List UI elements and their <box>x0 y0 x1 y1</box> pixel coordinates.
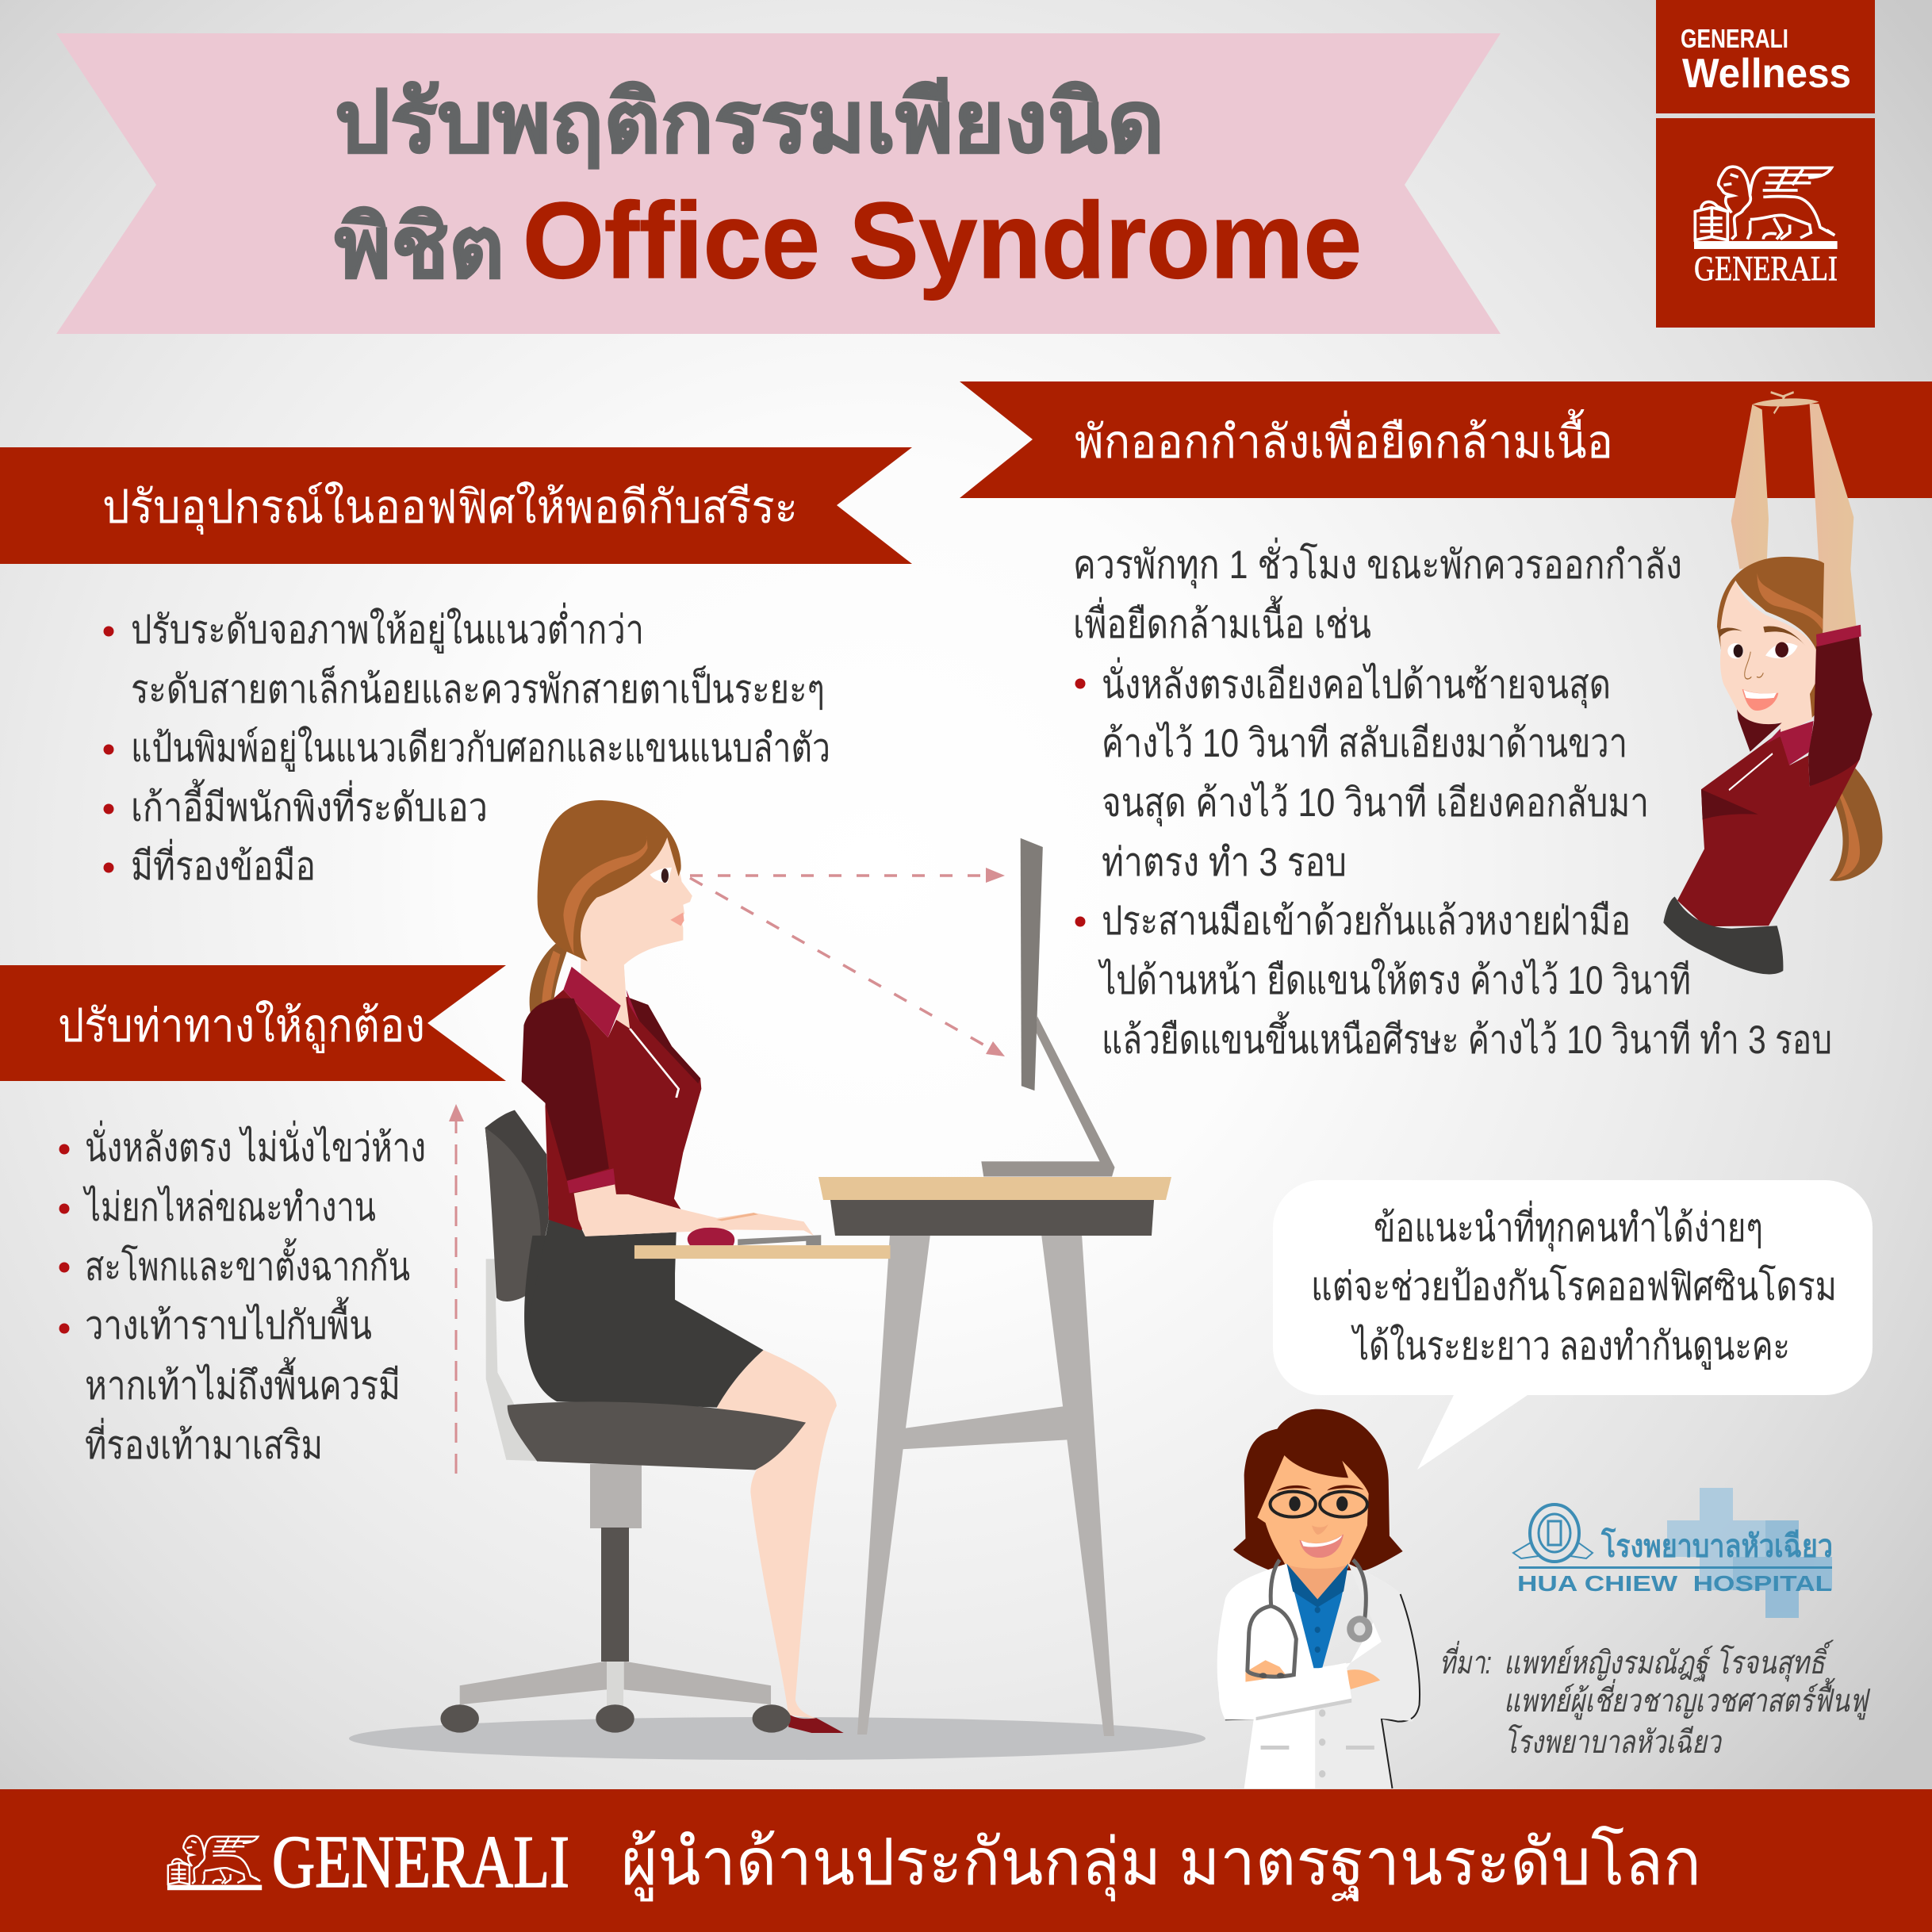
speech bubble: ได้ในระยะยาว ลองทำกันดูนะคะ <box>1351 1324 1790 1370</box>
illustration: stretching woman <box>1663 393 1883 974</box>
text block: stretching advice: เพื่อยืดกล้ามเนื้อ เช่น <box>1073 596 1371 646</box>
text block: posture tips: วางเท้าราบไปกับพื้น <box>85 1297 372 1347</box>
text block: stretching advice <box>1073 538 1832 1062</box>
title line 1: ปรับพฤติกรรมเพียงนิด <box>335 74 1164 170</box>
logo: Hua Chiew Hospital: HUA CHIEW HOSPITAL <box>1517 1571 1832 1596</box>
speech bubble <box>1273 1180 1873 1470</box>
text block: stretching advice: ประสานมือเข้าด้วยกันแล้วหงายฝ่ามือ <box>1102 899 1631 943</box>
banner: office equipment heading <box>0 447 912 564</box>
illustration: doctor <box>1217 1409 1420 1788</box>
text block: office equipment tips: ระดับสายตาเล็กน้อยและควรพักสายตาเป็นระยะๆ <box>131 665 825 711</box>
footer logo: GENERALI <box>272 1821 569 1903</box>
illustration: seated woman <box>440 800 891 1733</box>
text block: stretching advice: นั่งหลังตรงเอียงคอไปด้านซ้ายจนสุด <box>1102 657 1611 708</box>
banner: office equipment heading: ปรับอุปกรณ์ในออฟฟิศให้พอดีกับสรีระ <box>102 481 798 535</box>
text block: stretching advice: ท่าตรง ทำ 3 รอบ <box>1102 840 1347 884</box>
title ribbon <box>56 33 1501 334</box>
banner: posture heading <box>0 965 506 1081</box>
banner: right heading: พักออกกำลังเพื่อยืดกล้ามเนื้อ <box>1075 409 1613 468</box>
logo: Generali lion: GENERALI <box>1694 249 1838 288</box>
text block: office equipment tips: แป้นพิมพ์อยู่ในแนวเดียวกับศอกและแขนแนบลำตัว <box>131 726 830 772</box>
illustration: desk <box>818 1177 1171 1736</box>
banner: right heading <box>960 381 1932 498</box>
speech bubble: แต่จะช่วยป้องกันโรคออฟฟิศซินโดรม <box>1311 1264 1837 1309</box>
arrow: upright back <box>449 1104 464 1474</box>
text block: posture tips: ไม่ยกไหล่ขณะทำงาน <box>82 1185 376 1229</box>
logo: Generali Wellness: GENERALI <box>1681 24 1788 53</box>
logo: Hua Chiew Hospital: โรงพยาบาลหัวเฉียว <box>1600 1528 1833 1564</box>
banner: posture heading: ปรับท่าทางให้ถูกต้อง <box>58 999 425 1053</box>
footer band <box>0 1789 1932 1932</box>
text block: posture tips: ที่รองเท้ามาเสริม <box>85 1418 323 1467</box>
text block: stretching advice: ค้างไว้ 10 วินาที สลับเอียงมาด้านขวา <box>1102 721 1627 765</box>
arrow: horizontal line of sight <box>690 868 1005 883</box>
footer logo <box>167 1821 569 1903</box>
title line 2: Office Syndrome <box>523 180 1362 301</box>
text block: source: ที่มา: <box>1439 1640 1492 1681</box>
speech bubble: ข้อแนะนำที่ทุกคนทำได้ง่ายๆ <box>1374 1201 1763 1252</box>
text block: stretching advice: จนสุด ค้างไว้ 10 วินาที เอียงคอกลับมา <box>1102 780 1649 826</box>
illustration: monitor <box>981 838 1115 1177</box>
text block: office equipment tips: มีที่รองข้อมือ <box>131 839 316 888</box>
text block: posture tips <box>59 1121 426 1467</box>
arrow: downward line of sight <box>690 878 1005 1056</box>
text block: source: แพทย์หญิงรมณัฎฐ์ โรจนสุทธิ์ <box>1504 1639 1834 1682</box>
logo: Generali lion <box>1656 118 1875 328</box>
text block: office equipment tips <box>103 603 830 888</box>
illustration: chair <box>460 1110 771 1707</box>
text block: posture tips: หากเท้าไม่ถึงพื้นควรมี <box>85 1357 401 1408</box>
text block: posture tips: นั่งหลังตรง ไม่นั่งไขว่ห้าง <box>85 1121 426 1170</box>
text block: stretching advice: ควรพักทุก 1 ชั่วโมง ขณะพักควรออกกำลัง <box>1073 538 1682 588</box>
text block: source: โรงพยาบาลหัวเฉียว <box>1504 1723 1723 1760</box>
logo: Generali Wellness <box>1656 0 1875 113</box>
text block: posture tips: สะโพกและขาตั้งฉากกัน <box>85 1238 410 1289</box>
text block: source <box>1439 1639 1871 1760</box>
footer slogan: ผู้นำด้านประกันกลุ่ม มาตรฐานระดับโลก <box>621 1827 1701 1902</box>
text block: office equipment tips: ปรับระดับจอภาพให้อยู่ในแนวต่ำกว่า <box>131 603 644 654</box>
logo: Generali Wellness: Wellness <box>1682 51 1851 97</box>
text block: stretching advice: ไปด้านหน้า ยืดแขนให้ตรง ค้างไว้ 10 วินาที <box>1098 958 1691 1002</box>
title line 2: พิชิต <box>335 199 504 295</box>
text block: office equipment tips: เก้าอี้มีพนักพิงที่ระดับเอว <box>131 779 488 830</box>
illustration: floor shadow <box>349 1717 1206 1760</box>
logo: Hua Chiew Hospital <box>1513 1488 1833 1618</box>
